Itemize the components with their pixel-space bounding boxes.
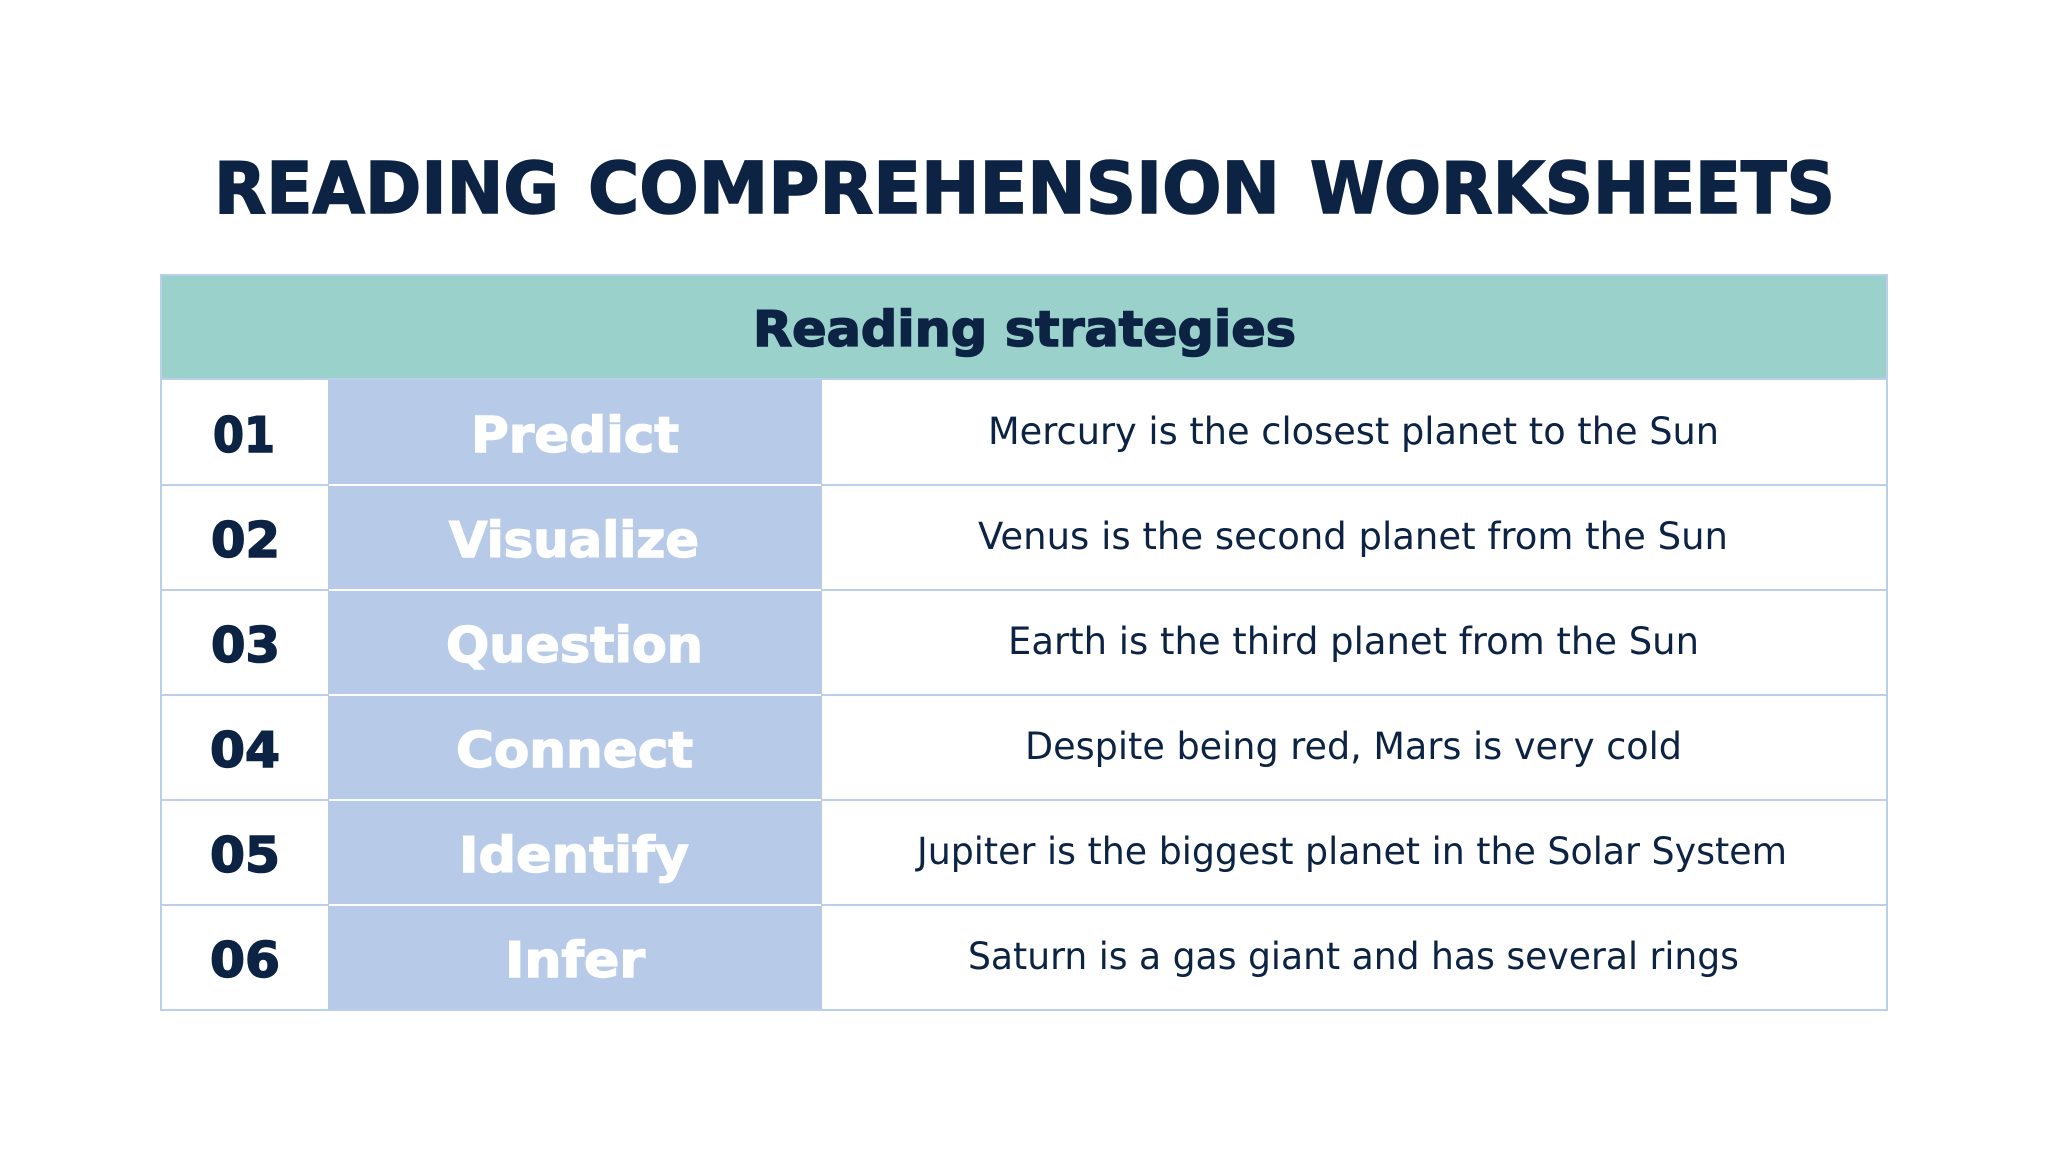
row 03: 03 <box>211 617 280 674</box>
row 05 <box>210 827 1787 884</box>
row 03: Earth is the third planet from the Sun <box>1008 620 1699 663</box>
row 06: Saturn is a gas giant and has several rings <box>968 935 1739 978</box>
strategy column fill <box>328 380 822 1010</box>
row 06: 06 <box>210 932 280 989</box>
title <box>214 147 1835 230</box>
title: COMPREHENSION <box>588 147 1280 230</box>
row 02: Venus is the second planet from the Sun <box>978 515 1728 558</box>
row 01 <box>213 407 1719 464</box>
row 03 <box>211 617 1699 674</box>
row 02: 02 <box>211 512 280 569</box>
title: READING <box>214 147 559 230</box>
row 02: Visualize <box>449 512 699 569</box>
row 04 <box>210 722 1682 779</box>
row 01: Mercury is the closest planet to the Sun <box>988 410 1719 453</box>
row 05: Identify <box>459 827 689 884</box>
row 06: Infer <box>505 932 646 989</box>
title: WORKSHEETS <box>1310 147 1835 230</box>
row 03: Question <box>446 617 703 674</box>
table header label: Reading strategies <box>753 301 1296 358</box>
row 01: Predict <box>471 407 679 464</box>
row 04: Despite being red, Mars is very cold <box>1025 725 1682 768</box>
row 06 <box>210 932 1739 989</box>
row 05: 05 <box>210 827 280 884</box>
row 04: Connect <box>456 722 693 779</box>
row 05: Jupiter is the biggest planet in the Solar System <box>915 830 1787 873</box>
table: reading strategies <box>160 274 1888 1011</box>
row 02 <box>211 512 1728 569</box>
row 01: 01 <box>213 407 275 464</box>
row 04: 04 <box>210 722 280 779</box>
table header band <box>161 275 1887 379</box>
